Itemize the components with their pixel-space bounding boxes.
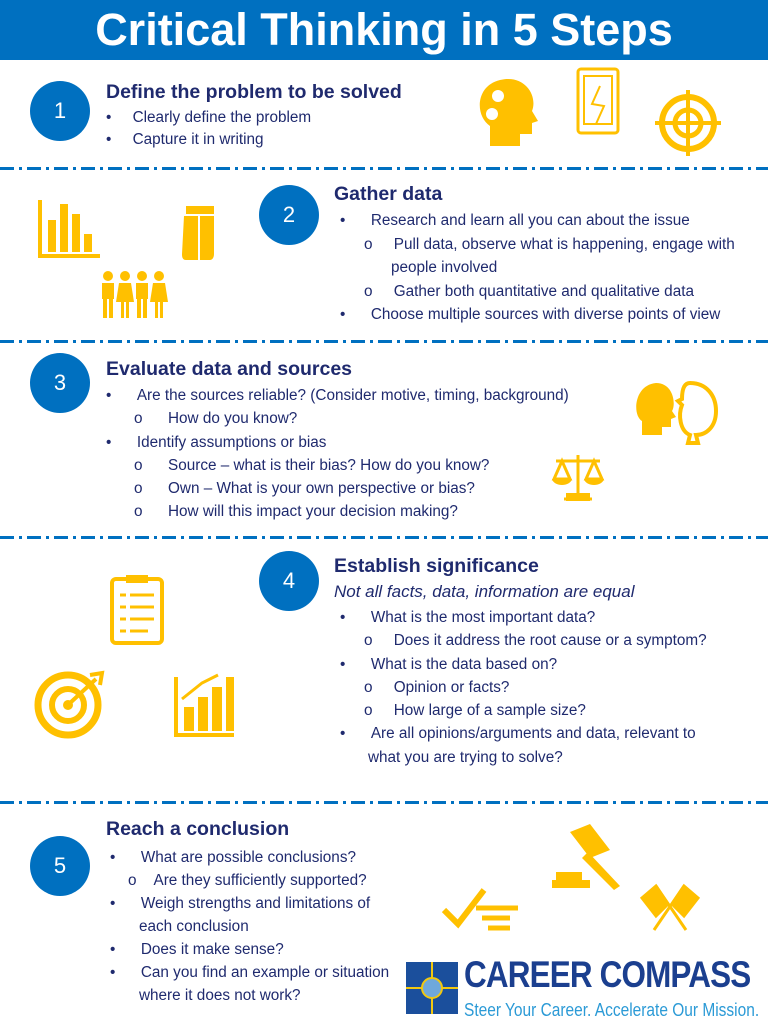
step 2 bullets [340, 212, 735, 323]
icons: chart, binoculars, people [38, 200, 214, 318]
step 4 bullets: • What is the most important data? [340, 609, 595, 626]
icons: checklist, gavel, flags [442, 824, 700, 931]
step 4 heading: Establish significance [334, 555, 539, 577]
step 3 bullets: • Are the sources reliable? (Consider motive, timing, background) [106, 387, 569, 404]
step 3 bullets: • Identify assumptions or bias [106, 434, 326, 451]
step 5 bullets: • Can you find an example or situation [110, 964, 389, 981]
step 5 bullets: • Weigh strengths and limitations of [110, 895, 370, 912]
step 4 bullets: • Are all opinions/arguments and data, relevant to [340, 725, 696, 742]
step 4 bullets [340, 609, 707, 766]
step 4 bullets: • What is the data based on? [340, 656, 557, 673]
title [0, 0, 768, 60]
icons: checklist, target arrow, growth chart [34, 575, 234, 738]
step 3 bullets: o How do you know? [134, 410, 297, 427]
step 4 subheading: Not all facts, data, information are equal [334, 582, 634, 601]
panel: step 4 [34, 551, 707, 766]
step 3 heading: Evaluate data and sources [106, 358, 352, 380]
step 4 bullets: o Opinion or facts? [364, 679, 509, 696]
step 5 number [30, 836, 90, 896]
logo: career compass: Steer Your Career. Accelerate Our Mission. [464, 1000, 759, 1020]
step 3 number [30, 353, 90, 413]
step 2 bullets: o Pull data, observe what is happening, engage with [364, 236, 735, 252]
step 2 bullets: o Gather both quantitative and qualitative data [364, 282, 694, 300]
panel: step 2 [38, 183, 735, 323]
logo: career compass: CAREER COMPASS [464, 954, 750, 995]
step 1 number: 1 [54, 98, 66, 123]
panel: step 1 [30, 68, 721, 156]
step 5 heading: Reach a conclusion [106, 818, 289, 840]
logo: career compass [406, 954, 759, 1020]
step 5 bullets [110, 849, 389, 1004]
step 4 bullets: o How large of a sample size? [364, 702, 586, 719]
step 1 bullets: • Capture it in writing [106, 131, 264, 148]
step 3 bullets: o How will this impact your decision making? [134, 503, 458, 520]
step 5 bullets: where it does not work? [139, 987, 301, 1004]
step 4 bullets: o Does it address the root cause or a symptom? [364, 632, 707, 649]
step 2 number: 2 [283, 202, 295, 227]
step 4 number: 4 [283, 568, 295, 593]
step 4 bullets: what you are trying to solve? [368, 749, 563, 766]
panel: step 5 [30, 818, 759, 1020]
step 2 bullets: • Research and learn all you can about the issue [340, 212, 690, 229]
step 1 bullets [106, 109, 311, 148]
title: Critical Thinking in 5 Steps [95, 4, 673, 55]
step 1 number [30, 81, 90, 141]
step 5 bullets: • What are possible conclusions? [110, 849, 356, 866]
step 1 bullets: • Clearly define the problem [106, 109, 311, 126]
icons: head gears, tablet, target [480, 68, 721, 156]
step 2 bullets: • Choose multiple sources with diverse points of view [340, 306, 720, 323]
step 4 number [259, 551, 319, 611]
icons: faces, scale [552, 381, 718, 501]
step 2 heading: Gather data [334, 183, 442, 205]
step 3 bullets: o Source – what is their bias? How do you know? [134, 457, 489, 474]
step 3 bullets: o Own – What is your own perspective or bias? [134, 480, 475, 497]
step 3 number: 3 [54, 370, 66, 395]
step 3 bullets [106, 387, 569, 520]
step 5 bullets: o Are they sufficiently supported? [128, 872, 367, 889]
step 1 heading: Define the problem to be solved [106, 81, 402, 103]
step 5 number: 5 [54, 853, 66, 878]
step 5 bullets: • Does it make sense? [110, 941, 284, 958]
step 5 bullets: each conclusion [139, 918, 249, 935]
panel: step 3 [30, 353, 718, 520]
step 2 bullets: people involved [391, 259, 497, 276]
step 2 number [259, 185, 319, 245]
